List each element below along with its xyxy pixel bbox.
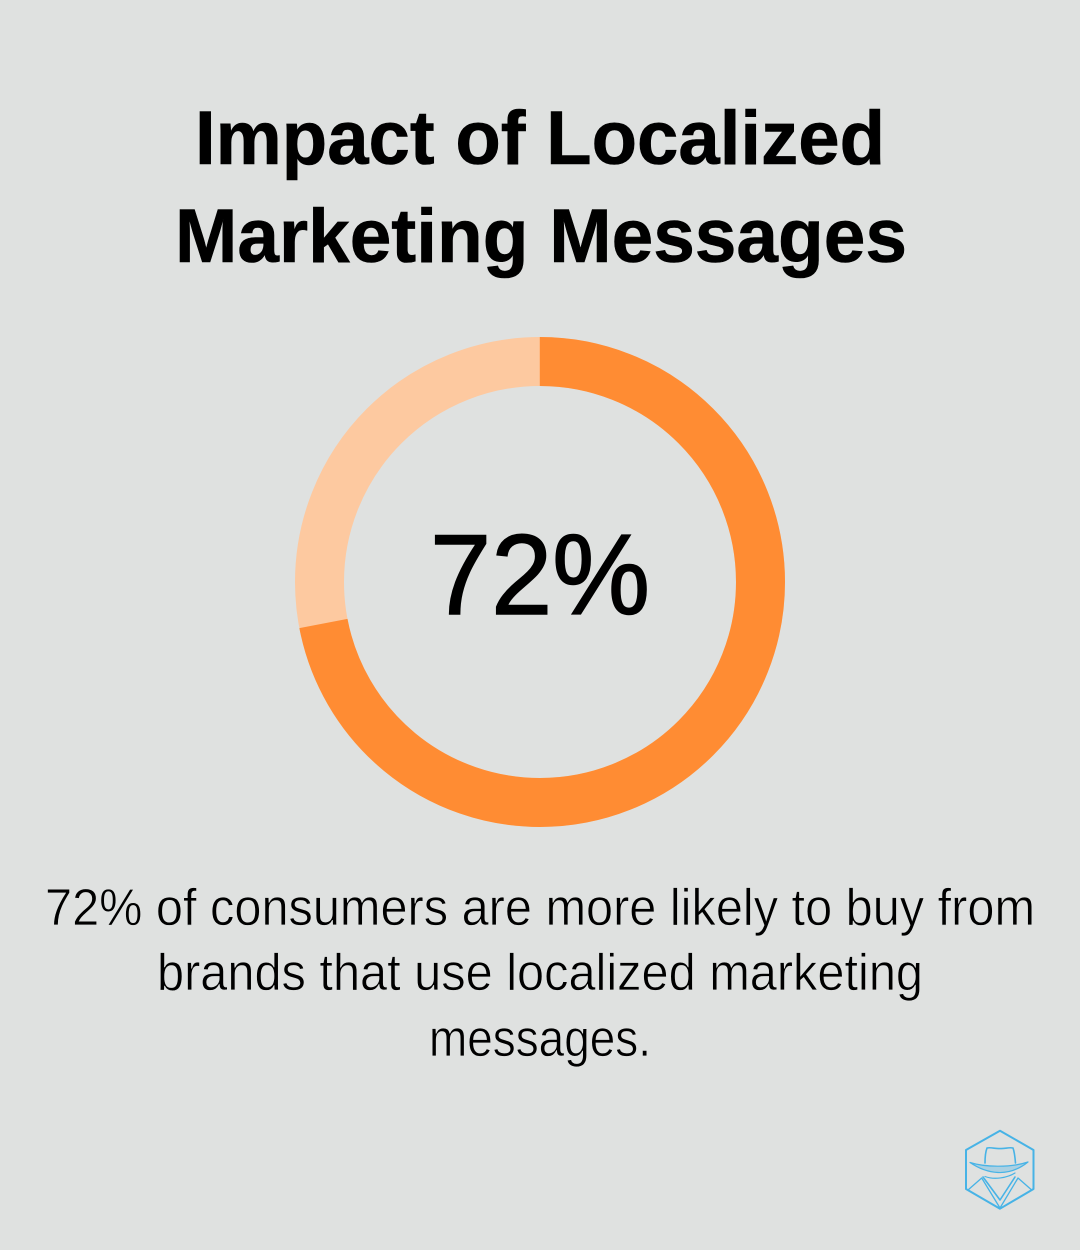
- title: Impact of Localized: [195, 96, 885, 181]
- description text: [45, 879, 1035, 1068]
- title: [175, 96, 907, 279]
- description text: messages.: [429, 1010, 651, 1068]
- donut center value: 72%: [430, 512, 650, 639]
- title: Marketing Messages: [175, 194, 907, 279]
- description text: 72% of consumers are more likely to buy from: [45, 879, 1035, 937]
- description text: brands that use localized marketing: [157, 944, 923, 1002]
- donut chart: 72 percent: [320, 362, 760, 802]
- icon: hexagon logo with hat and suit: [966, 1131, 1034, 1209]
